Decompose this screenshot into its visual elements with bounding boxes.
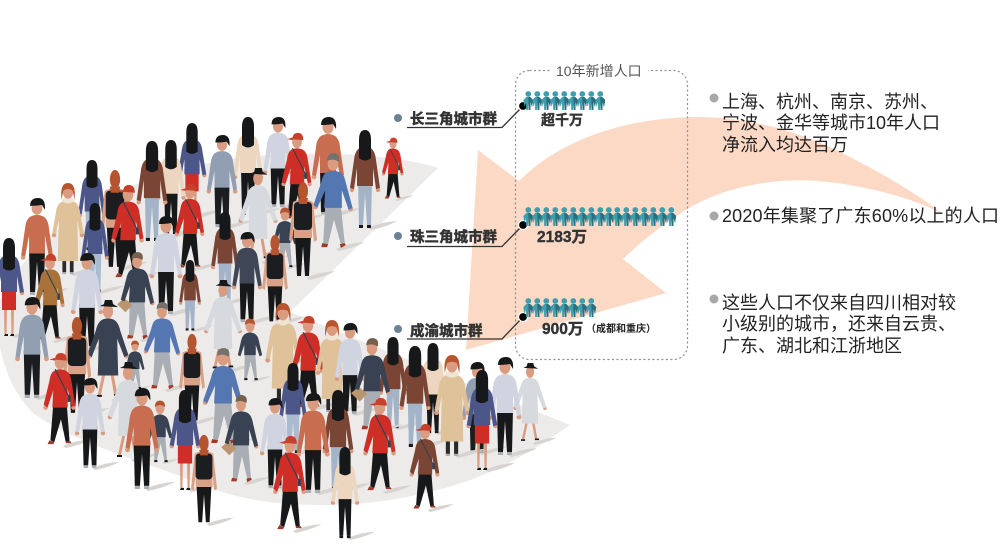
person: orange man [125, 388, 175, 491]
person: white hat [108, 362, 160, 462]
person: red cap [43, 353, 91, 448]
person: red cap [175, 184, 218, 271]
person: red skirt woman [169, 390, 218, 492]
text block: net inflow: 上海、杭州、南京、苏州、 [722, 92, 938, 112]
person: red cap [111, 185, 159, 281]
person: beige coat [265, 303, 316, 405]
label: Yangtze delta [394, 102, 528, 128]
person: brown jacket cap [410, 424, 453, 512]
person: plaid [71, 253, 118, 351]
label: Chengdu-Chongqing: 成渝城市群 [410, 322, 483, 340]
person: child [238, 319, 270, 382]
person: brown woman [179, 260, 213, 332]
person: gray man [207, 135, 252, 229]
crowd of people [0, 117, 556, 540]
dotted box: 10-year new population: 10年新增人口 [556, 63, 642, 79]
text block: net inflow: 净流入均达百万 [722, 135, 848, 155]
person: red skirt woman [466, 370, 515, 472]
person: brown woman [211, 212, 254, 304]
label: Pearl River delta: 珠三角城市群 [410, 228, 497, 246]
person: backpack [191, 435, 234, 526]
person: tan cap [34, 254, 79, 343]
value: 900万: （成都和重庆） [586, 322, 656, 335]
person: white hat [239, 168, 289, 264]
value: 2183万: 2183万 [537, 229, 587, 246]
person: backpack [289, 182, 335, 280]
person: navy woman [279, 363, 322, 455]
person: dark plaid [232, 232, 276, 324]
person: brown woman [322, 390, 371, 492]
person: beige coat [434, 355, 485, 458]
person: navy woman [78, 160, 121, 252]
person: red skirt woman [0, 238, 41, 338]
text block: net inflow [710, 92, 940, 155]
person: brown woman [379, 337, 423, 430]
floor: gray crowd wedge [0, 154, 570, 505]
value: 900万 [542, 321, 656, 338]
person: cream woman [156, 140, 202, 236]
text block: net inflow: 宁波、金华等城市10年人口 [722, 113, 940, 133]
dotted box: 10-year new population [516, 62, 688, 360]
person: dark dress hat [87, 300, 141, 402]
person: child [126, 340, 151, 390]
text block: origins: 广东、湖北和江浙地区 [722, 336, 902, 356]
person: gray man [462, 362, 507, 455]
person: white hat [204, 280, 253, 373]
person: brown woman [350, 130, 397, 230]
person: blue walker [203, 348, 255, 447]
person: backpack [179, 334, 221, 424]
person: brown woman [399, 346, 448, 449]
text block: Guangdong share: 2020年集聚了广东60%以上的人口 [722, 206, 999, 226]
person: orange man [296, 393, 346, 495]
person: cream woman [419, 343, 462, 435]
person: brown woman [136, 141, 185, 243]
value: over ten million: 超千万 [541, 112, 583, 128]
person: red cap small [382, 138, 413, 201]
person: backpack [101, 170, 148, 271]
person: red cap [273, 436, 321, 533]
person: gray man [15, 297, 65, 400]
text block: origins: 这些人口不仅来自四川相对较 [722, 293, 956, 313]
pictogram row: 9 million [523, 298, 596, 317]
pictogram row: 21.83 million [523, 207, 676, 226]
person: plaid [260, 398, 304, 490]
person: cream woman [331, 447, 375, 540]
person: child [148, 401, 180, 464]
person: plaid [263, 117, 307, 209]
person: plaid [75, 378, 119, 470]
label: Yangtze delta: 长三角城市群 [410, 110, 497, 128]
person: red cap [281, 133, 326, 222]
person: orange man [21, 198, 69, 297]
person: white hat [513, 363, 556, 445]
person: plaid [335, 323, 380, 416]
person: dark man with bag [351, 338, 402, 433]
person: navy woman [81, 203, 124, 294]
person: plaid [150, 216, 198, 316]
text block: origins [710, 293, 956, 356]
person: child [273, 208, 305, 269]
person: backpack [262, 235, 304, 325]
person: plaid [489, 357, 537, 457]
person: red cap [291, 316, 339, 411]
person: navy woman [178, 123, 222, 218]
person: red cap [363, 398, 411, 494]
label: Pearl River delta [394, 220, 528, 246]
person: blue walker [313, 153, 364, 251]
person: blue walker [144, 302, 191, 392]
value: 900万: 900万 [542, 321, 583, 338]
label: Chengdu-Chongqing [394, 312, 528, 340]
person: cream woman [233, 117, 280, 217]
text block: origins: 小级别的城市，还来自云贵、 [722, 314, 956, 334]
person: beige coat [316, 320, 362, 414]
pictogram row: over ten million [523, 91, 605, 110]
person: beige coat [52, 183, 98, 276]
person: dark man with bag [221, 395, 270, 485]
migration arrow [466, 117, 942, 350]
person: dark man with bag [117, 252, 166, 342]
person: backpack [63, 317, 110, 417]
person: orange man [312, 117, 360, 217]
